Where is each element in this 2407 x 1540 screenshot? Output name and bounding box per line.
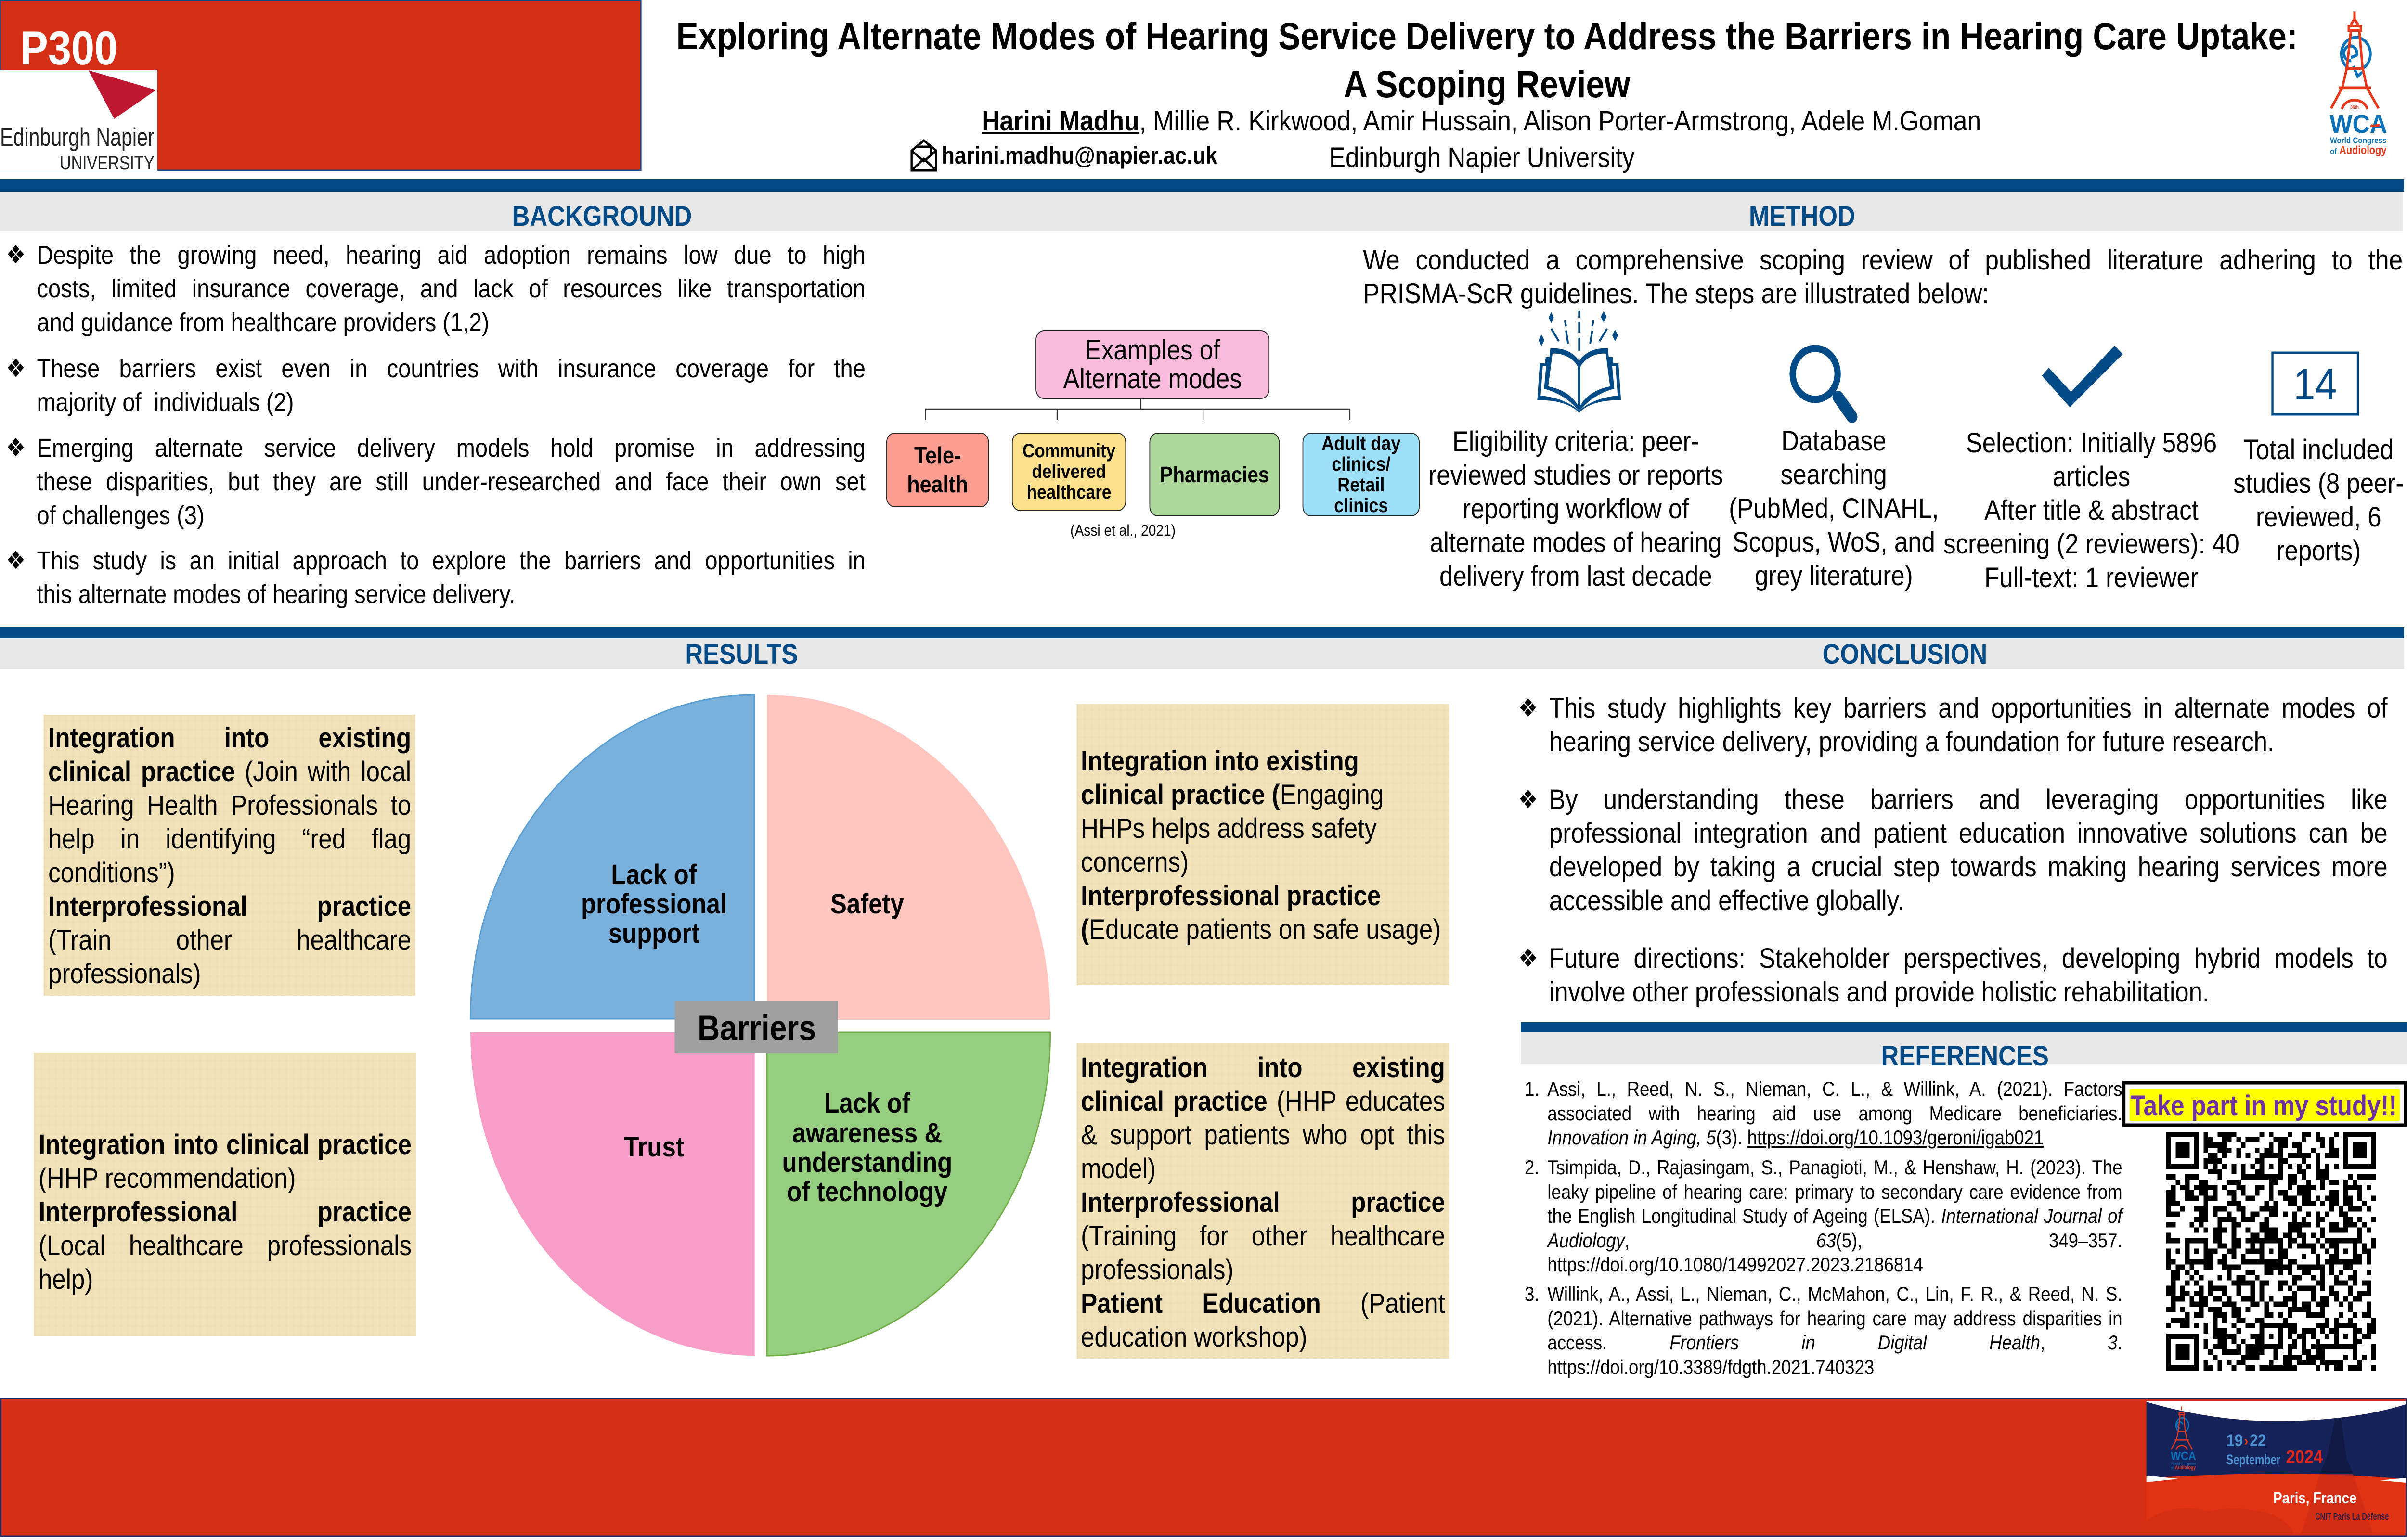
pie chart: barriers [470,695,1050,1356]
wedge: lack of awareness and understanding of technology: Lack of [824,1088,910,1119]
reference 2: the English Longitudinal Study of Ageing (ELSA). International Journal of [1547,1205,2122,1227]
reference 1: associated with hearing aid use among Medicare beneficiaries. [1547,1102,2122,1124]
text block: conclusion bullet 2: developed by taking a crucial step towards making hearing services more [1549,851,2388,883]
caption: database searching: Scopus, WoS, and [1733,526,1935,558]
results box: lack of awareness and understanding of technology: education workshop) [1081,1322,1307,1353]
text: ❖ [6,354,26,383]
reference 2: leaky pipeline of hearing care: primary to secondary care evidence from [1547,1180,2122,1203]
heading: background: BACKGROUND [512,201,692,232]
call to action: take part in my study: Take part in my study!! [2130,1090,2397,1121]
text block: background bullet 1: costs, limited insurance coverage, and lack of resources like transportation [37,274,866,303]
poster number P300: P300 [20,22,117,75]
results box: lack of awareness and understanding of technology: Patient Education (Patient [1081,1288,1445,1319]
node: telehealth [886,433,989,507]
caption: selection: After title & abstract [1984,495,2199,526]
wedge: lack of professional support: support [608,918,699,949]
center label: barriers [675,1001,838,1053]
icon: magnifying glass [1793,348,1852,417]
results box: lack of professional support: (Train other healthcare [48,924,411,956]
node: examples of alternate modes [1035,330,1269,399]
section header bar: background and method [0,192,2403,231]
congress banner: Paris 2024: 19 [2226,1431,2243,1450]
caption: database searching [1729,424,1939,593]
reference 3: Willink, A., Assi, L., Nieman, C., McMahon, C., Lin, F. R., & Reed, N. S. [1547,1283,2122,1305]
text block: background bullet 2: These barriers exist even in countries with insurance coverage for the [37,354,866,383]
heading: references: REFERENCES [1881,1040,2049,1072]
text block: method intro: PRISMA-ScR guidelines. The steps are illustrated below: [1363,278,1989,309]
text block: background bullet 2: majority of individuals (2) [37,388,294,417]
caption: selection [1943,426,2239,595]
caption: selection: Full-text: 1 reviewer [1984,562,2199,593]
results box: lack of professional support: Integration into existing [48,722,411,754]
text block: background bullet 4: this alternate modes of hearing service delivery. [37,580,515,609]
results box: lack of professional support: help in identifying “red flag [48,823,411,855]
caption: total included studies: reviewed, 6 [2256,501,2381,533]
wedge: trust [470,1032,755,1356]
call to action: take part in my study [2124,1083,2405,1125]
reference 2: https://doi.org/10.1080/14992027.2023.2186814 [1547,1253,1923,1276]
results box: safety [1076,704,1449,985]
results box: lack of awareness and understanding of technology: model) [1081,1153,1156,1184]
node: pharmacies [1150,433,1280,516]
heading: method: METHOD [1749,201,1855,232]
results box: lack of awareness and understanding of technology: (Training for other healthcare [1081,1220,1445,1252]
logo: Edinburgh Napier University: Edinburgh Napier [0,123,155,152]
reference 2 [1547,1155,2122,1277]
congress banner: Paris 2024: 2024 [2286,1447,2323,1467]
text block: method intro [1363,244,2403,311]
icon: number 14 box: 14 [2293,360,2337,409]
text: ❖ [6,434,26,462]
results box: lack of professional support [44,715,415,996]
text block: conclusion bullet 1 [1549,692,2388,759]
caption: database searching: (PubMed, CINAHL, [1729,493,1939,524]
caption: database searching: grey literature) [1755,560,1913,591]
section rule: middle [0,627,2404,638]
wedge: safety [767,695,1050,1020]
title: A Scoping Review [1344,63,1630,105]
logo: World Congress of Audiology: Audiology [2339,144,2387,156]
node: adult day clinics: Adult day [1321,432,1400,454]
authors: Harini Madhu, Millie R. Kirkwood, Amir Hussain, Alison Porter-Armstrong, Adele M.Goman [982,105,1981,137]
results box: safety: HHPs helps address safety [1081,813,1377,844]
reference 3 [1547,1282,2122,1379]
congress banner: Paris 2024: September [2226,1451,2280,1467]
results box: safety: Integration into existing [1081,745,1359,777]
text: 3. [1525,1283,1539,1305]
affiliation: Edinburgh Napier University [1329,142,1635,173]
node: adult day clinics [1303,433,1420,516]
wedge: safety: Safety [830,888,904,920]
text block: background bullet 3: Emerging alternate service delivery models hold promise in addressing [37,434,866,462]
reference 1: Assi, L., Reed, N. S., Nieman, C. L., & Willink, A. (2021). Factors [1547,1078,2122,1100]
logo: Edinburgh Napier University: UNIVERSITY [60,152,155,173]
icon: email envelope [912,141,936,170]
caption: total included studies: reports) [2277,535,2361,566]
node: adult day clinics: Retail [1337,474,1385,496]
text: ❖ [1518,785,1538,814]
results box: trust: Integration into clinical practice [39,1129,412,1160]
diagram connectors [926,399,1350,420]
reference 2: Tsimpida, D., Rajasingam, S., Panagioti, M., & Henshaw, H. (2023). The [1547,1156,2122,1179]
logo: World Congress of Audiology: 36th [2350,104,2359,110]
center label: barriers: Barriers [698,1008,816,1048]
reference 3: https://doi.org/10.3389/fdgth.2021.740323 [1547,1355,1874,1378]
text: ❖ [6,241,26,270]
caption: eligibility criteria: reporting workflow of [1462,493,1689,525]
small WCA logo: of [2171,1467,2174,1470]
small WCA logo [2171,1406,2196,1471]
wedge: lack of awareness and understanding of technology [767,1032,1050,1356]
wedge: lack of professional support: professional [581,888,727,920]
node: examples of alternate modes: Alternate modes [1063,363,1242,395]
text block: conclusion bullet 3: Future directions: Stakeholder perspectives, developing hybrid models to [1549,943,2388,974]
results box: lack of professional support: Hearing Health Professionals to [48,790,411,821]
title: Exploring Alternate Modes of Hearing Service Delivery to Address the Barriers in Hearing Care Uptake: [676,15,2298,57]
wedge: lack of awareness and understanding of technology: of technology [787,1176,948,1207]
node: community delivered healthcare [1012,433,1126,511]
results box: lack of awareness and understanding of technology: Interprofessional practice [1081,1187,1445,1218]
node: community delivered healthcare: healthcare [1027,482,1111,503]
section rule: top [0,179,2404,192]
results box: safety: (Educate patients on safe usage) [1081,914,1441,945]
icon: open book [1537,311,1621,413]
results box: lack of awareness and understanding of technology: & support patients who opt this [1081,1119,1445,1151]
footer red banner [1,1399,2406,1536]
text block: background bullet 3 [37,431,866,532]
caption: total included studies: studies (8 peer- [2233,468,2404,499]
wedge: lack of awareness and understanding of technology: understanding [782,1147,952,1178]
results box: lack of professional support: Interprofessional practice [48,891,411,922]
section header bar: results and conclusion [0,638,2404,669]
caption: selection: articles [2053,461,2130,492]
wedge: lack of professional support [470,695,754,1019]
results box: trust: Interprofessional practice [39,1196,412,1228]
node: pharmacies: Pharmacies [1160,462,1269,487]
logo: World Congress of Audiology [2329,11,2387,156]
results box: lack of awareness and understanding of technology: clinical practice (HHP educates [1081,1086,1445,1117]
node: adult day clinics: clinics [1334,494,1388,516]
results box: lack of awareness and understanding of technology: professionals) [1081,1254,1233,1285]
results box: safety: concerns) [1081,847,1189,878]
text block: conclusion bullet 2 [1549,783,2388,918]
text block: conclusion bullet 2: accessible and effective globally. [1549,885,1904,916]
reference 1 [1547,1077,2122,1150]
section header bar: references [1521,1032,2407,1064]
text block: background bullet 1 [37,238,866,339]
results box: lack of awareness and understanding of technology [1076,1043,1449,1359]
reference 1: Innovation in Aging, 5(3). https://doi.org/10.1093/geroni/igab021 [1547,1126,2044,1149]
node: community delivered healthcare: Community [1022,440,1115,462]
caption: eligibility criteria: alternate modes of hearing [1430,527,1721,558]
results box: lack of awareness and understanding of technology: Integration into existing [1081,1052,1445,1083]
citation: (Assi et al., 2021) [1070,522,1176,539]
caption: total included studies [2233,433,2404,568]
text block: background bullet 3: these disparities, but they are still under-researched and face their own set [37,467,866,496]
QR code [2166,1132,2376,1371]
congress banner: Paris 2024 [2147,1401,2406,1533]
text block: conclusion bullet 3: involve other professionals and provide holistic rehabilitation. [1549,976,2209,1008]
congress banner: Paris 2024: CNIT Paris La Défense [2315,1511,2389,1522]
caption: eligibility criteria: delivery from last decade [1439,561,1712,592]
caption: selection: Selection: Initially 5896 [1966,427,2217,459]
logo: World Congress of Audiology: WCA [2329,109,2387,139]
wedge: lack of professional support: Lack of [611,859,697,890]
node: examples of alternate modes: Examples of [1085,334,1220,366]
header red banner [0,0,641,170]
text block: conclusion bullet 3 [1549,942,2388,1009]
caption: database searching: searching [1781,459,1887,490]
text block: background bullet 1: and guidance from healthcare providers (1,2) [37,308,489,337]
reference 3: (2021). Alternative pathways for hearing care may address disparities in [1547,1307,2122,1329]
heading: results: RESULTS [685,639,798,670]
heading: conclusion: CONCLUSION [1823,639,1987,670]
text: 1. [1525,1078,1539,1100]
results box: lack of professional support: conditions”) [48,857,175,888]
results box: trust [34,1053,416,1336]
wedge: trust: Trust [624,1131,684,1163]
congress banner: Paris 2024: 22 [2250,1431,2266,1450]
small WCA logo: Audiology [2175,1465,2196,1471]
logo: World Congress of Audiology: World Congress [2330,136,2386,145]
node: telehealth: health [907,472,968,498]
small WCA logo: World Congress [2171,1461,2196,1465]
node: community delivered healthcare: delivered [1032,461,1106,482]
text block: background bullet 1: Despite the growing need, hearing aid adoption remains low due to high [37,241,866,270]
email: harini.madhu@napier.ac.uk [942,142,1217,169]
logo: World Congress of Audiology: of [2330,147,2337,156]
caption: selection: screening (2 reviewers): 40 [1943,528,2239,560]
text block: conclusion bullet 1: This study highlights key barriers and opportunities in alternate modes of [1549,693,2388,724]
text block: background bullet 4 [37,544,866,611]
wedge: lack of awareness and understanding of technology: awareness & [792,1117,942,1149]
reference 2: Audiology, 63(5), 349–357. [1547,1229,2122,1251]
caption: eligibility criteria [1428,425,1723,593]
text: 2. [1525,1156,1539,1179]
results box: trust: (HHP recommendation) [39,1163,296,1194]
text block: conclusion bullet 2: By understanding these barriers and leveraging opportunities like [1549,784,2388,815]
results box: lack of professional support: clinical practice (Join with local [48,756,411,787]
caption: eligibility criteria: reviewed studies or reports [1428,460,1723,491]
results box: trust: help) [39,1264,93,1295]
text: ❖ [1518,694,1538,723]
node: telehealth: Tele- [914,443,961,469]
icon: check mark [2042,346,2122,407]
congress banner: Paris 2024: › [2244,1432,2248,1449]
text block: background bullet 4: This study is an initial approach to explore the barriers and opportunities in [37,546,866,575]
results box: trust: (Local healthcare professionals [39,1230,412,1261]
results box: lack of professional support: professionals) [48,958,201,989]
text block: method intro: We conducted a comprehensive scoping review of published literature adhering to the [1363,244,2403,276]
section rule: references [1521,1022,2407,1032]
caption: database searching: Database [1781,425,1886,457]
congress banner: Paris 2024: Paris, France [2273,1489,2356,1507]
icon: number 14 box [2273,353,2358,414]
text: ❖ [6,546,26,575]
caption: eligibility criteria: Eligibility criteria: peer- [1452,426,1699,457]
node: adult day clinics: clinics/ [1332,453,1390,475]
diagram: examples of alternate modes [886,330,1420,542]
reference 3: access. Frontiers in Digital Health, 3. [1547,1331,2122,1354]
text block: background bullet 2 [37,352,866,419]
text block: conclusion bullet 1: hearing service delivery, providing a foundation for future research. [1549,726,2274,757]
text: ❖ [1518,944,1538,973]
caption: total included studies: Total included [2243,434,2394,465]
logo: Edinburgh Napier University [0,70,157,173]
results box: safety: clinical practice (Engaging [1081,779,1384,810]
small WCA logo: WCA [2171,1450,2196,1463]
title [676,15,2298,105]
text block: conclusion bullet 2: professional integration and patient education innovative solutions can be [1549,818,2388,849]
text block: background bullet 3: of challenges (3) [37,501,205,530]
results box: safety: Interprofessional practice [1081,880,1381,911]
